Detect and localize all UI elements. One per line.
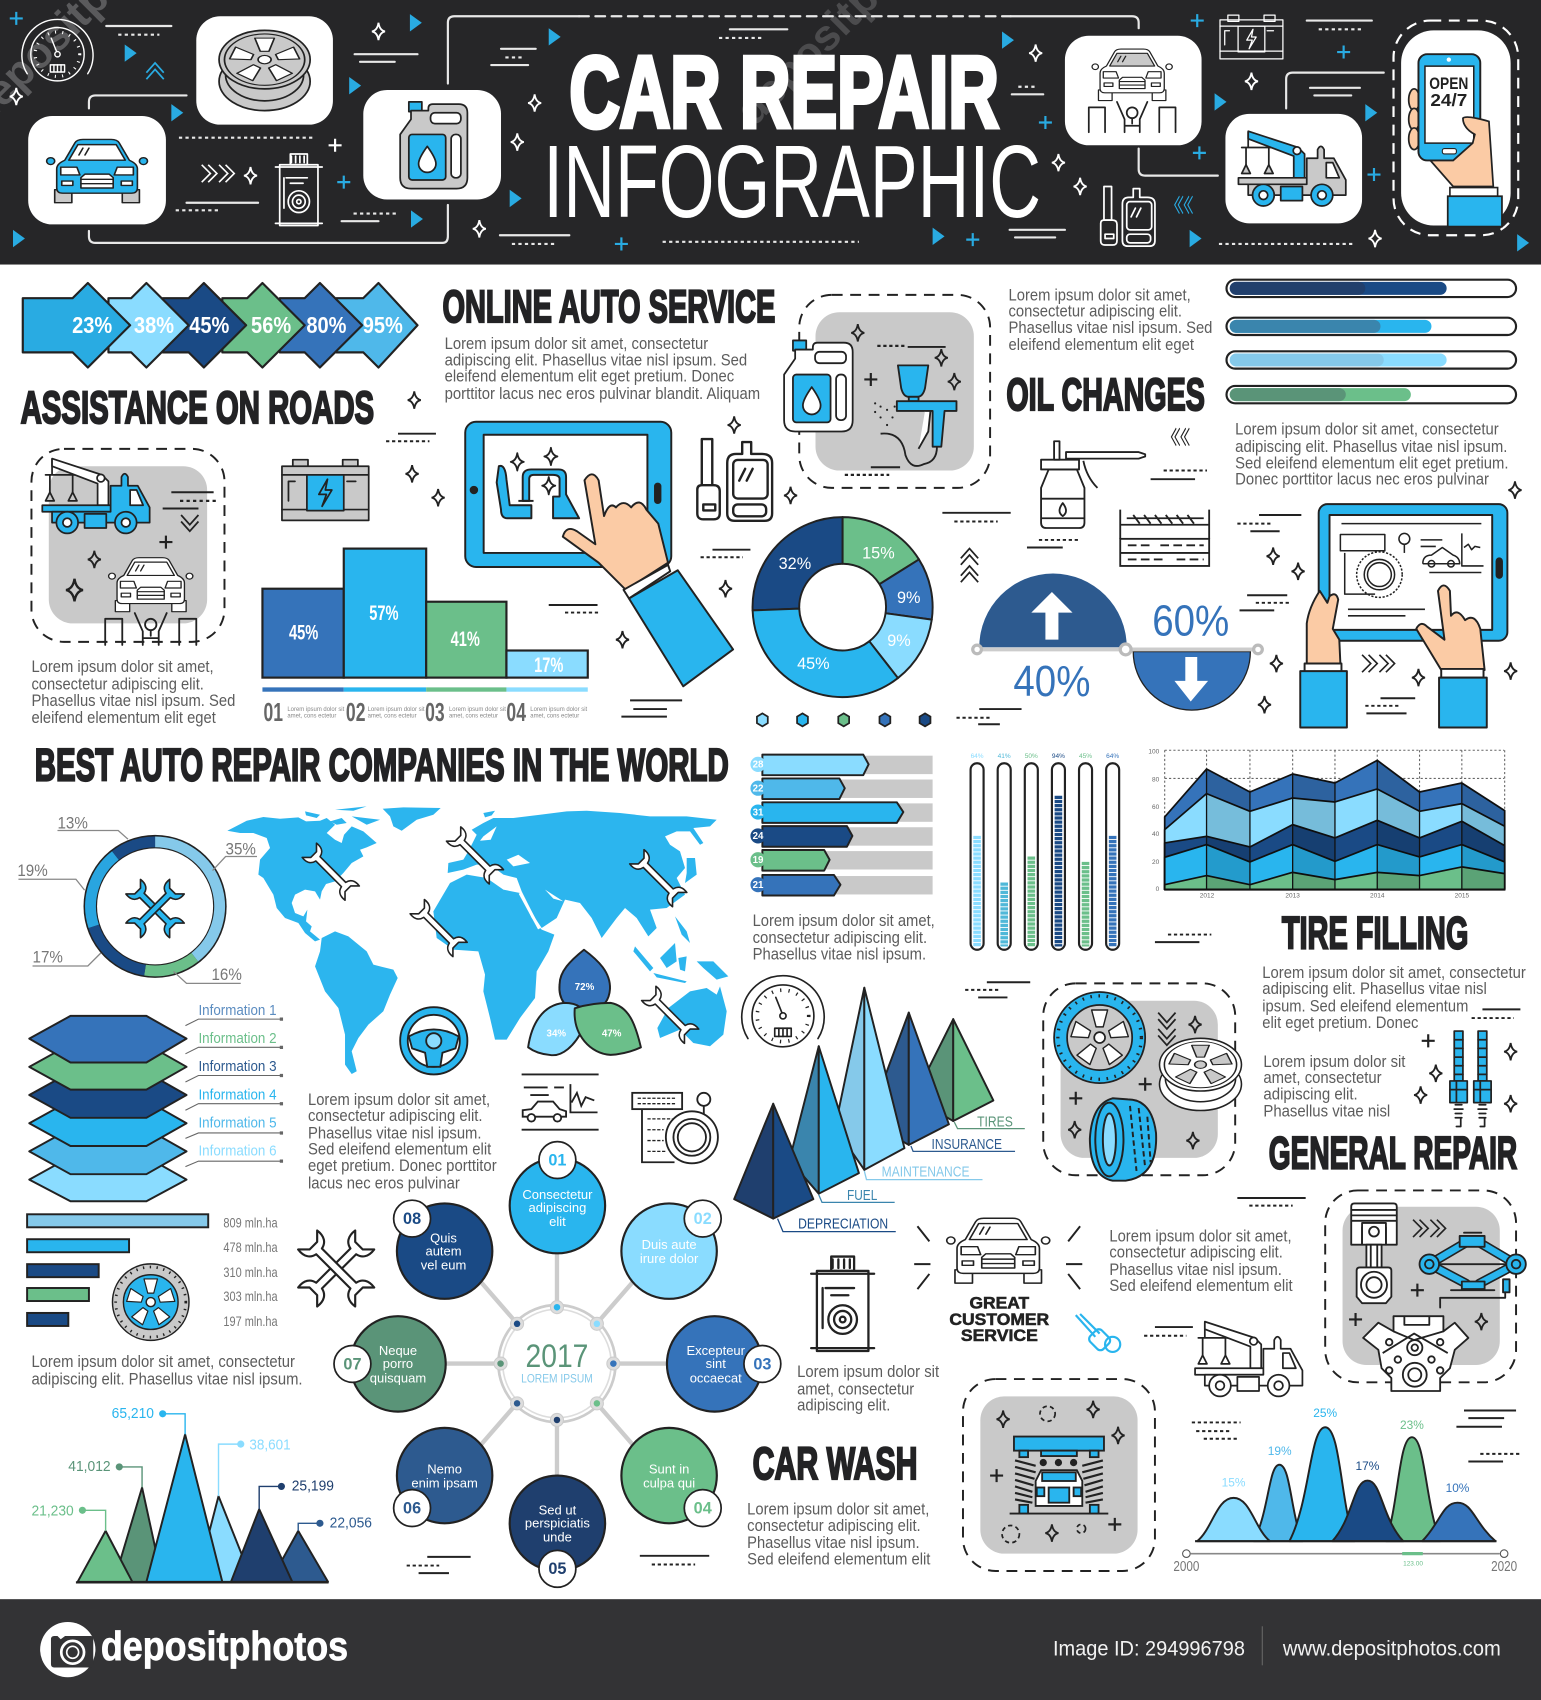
chart: bell peaks: 17%	[1356, 1459, 1380, 1473]
icon: toolbox	[1120, 510, 1209, 566]
text block: online auto service: porttitor lacus nec eros pulvinar blandit. Aliquam	[445, 384, 760, 403]
icon: car diagnostic chart	[522, 1074, 599, 1130]
chart: bell peaks: 23%	[1400, 1418, 1424, 1432]
node 05: 05	[548, 1560, 566, 1578]
footer url: www.depositphotos.com	[1282, 1636, 1501, 1661]
labels: pyramid categories: INSURANCE	[932, 1137, 1002, 1153]
bar chart: mln ha	[27, 1214, 278, 1329]
percentage arrows: 38%	[134, 312, 174, 338]
percentage arrows: 80%	[306, 312, 346, 338]
bar chart: four bars: 57%	[369, 600, 399, 625]
percentage arrows	[23, 283, 418, 368]
chart: mountain peaks: 65,210	[112, 1405, 154, 1422]
icon card: oil canister	[363, 90, 501, 199]
chart: mountain peaks: 22,056	[330, 1515, 372, 1532]
icon: tire document	[632, 1093, 718, 1163]
text block: world map: Phasellus vitae nisl ipsum.	[308, 1123, 481, 1142]
chart: vertical tubes: 64%	[971, 753, 984, 760]
chart: layered area: 2013	[1285, 893, 1300, 900]
chart: three petals: 72%	[575, 982, 595, 993]
node 06: 06	[403, 1500, 421, 1518]
node 01: elit	[549, 1214, 566, 1229]
text block: assistance: Phasellus vitae nisl ipsum. Sed	[31, 691, 235, 710]
text block: world map: Sed eleifend elementum elit	[308, 1140, 492, 1159]
node 02: 02	[694, 1210, 712, 1228]
chart: mountain peaks: 21,230	[31, 1503, 74, 1520]
heading: online auto service: ONLINE AUTO SERVICE	[442, 281, 775, 332]
node 02: irure dolor	[640, 1251, 699, 1266]
icon: piston	[1351, 1203, 1397, 1303]
icon: great customer service car	[914, 1218, 1082, 1289]
chart: circular hub 2017: 2017	[526, 1338, 588, 1374]
chart: layered area: 0	[1156, 886, 1160, 893]
chart: 40% and 60% half circles	[973, 574, 1262, 710]
text block: world map: consectetur adipiscing elit.	[308, 1106, 483, 1125]
bar chart: four bars: amet, cons ectetur	[449, 714, 498, 720]
heading: oil changes: OIL CHANGES	[1006, 369, 1205, 420]
ring chart with wrenches	[17, 814, 257, 984]
bar chart: four bars: amet, cons ectetur	[287, 714, 336, 720]
donut chart: 32%	[779, 555, 811, 573]
node 08: 08	[403, 1210, 421, 1228]
chart: vertical tubes: 64%	[1106, 753, 1119, 760]
panel: general repair illustration	[1325, 1190, 1526, 1391]
percentage arrows: 23%	[72, 312, 112, 338]
node 02	[621, 1200, 721, 1299]
node 04: Sunt in	[649, 1461, 689, 1476]
donut chart: 15%	[862, 544, 895, 562]
text block: customer service	[1109, 1226, 1293, 1295]
bar chart: four bars: 45%	[289, 620, 318, 645]
donut chart: 9%	[897, 589, 921, 607]
node 08: autem	[425, 1243, 462, 1258]
node 08: vel eum	[421, 1258, 466, 1273]
percentage arrows: 95%	[363, 312, 403, 338]
bar chart: four bars: amet, cons ectetur	[368, 714, 417, 720]
text: great customer service: GREAT	[969, 1295, 1029, 1313]
chart: horizontal arrow bars: 21	[753, 880, 764, 891]
text: great customer service: SERVICE	[961, 1327, 1038, 1345]
node 07: 07	[343, 1355, 361, 1373]
text block: bars: adipiscing elit. Phasellus vitae nisl ipsum.	[31, 1370, 303, 1389]
text block: oil changes	[1235, 420, 1508, 489]
icon: blue car key	[1076, 1314, 1120, 1352]
panel: assistance on roads illustration	[31, 449, 224, 645]
text block: customer service: consectetur adipiscing elit.	[1109, 1243, 1283, 1262]
title: INFOGRAPHIC	[543, 124, 1041, 239]
text block: assistance: eleifend elementum elit eget	[31, 708, 216, 727]
text block: spark plugs: Lorem ipsum dolor sit	[1263, 1052, 1406, 1071]
icon card: phone open 24/7: 24/7	[1430, 90, 1467, 110]
text block: world map: eget pretium. Donec porttitor	[308, 1156, 497, 1175]
bar chart: mln ha: 303 mln.ha	[223, 1289, 278, 1304]
chart: vertical tubes: 41%	[998, 753, 1011, 760]
footer logo: depositphotos	[101, 1623, 348, 1669]
icon card: car	[28, 116, 166, 224]
text block: arrow bars	[753, 911, 935, 964]
chart: horizontal arrow bars	[750, 755, 933, 896]
node 05: Sed ut	[539, 1503, 577, 1518]
node 07: Neque	[379, 1343, 417, 1358]
legend: information labels: Information 4	[198, 1087, 277, 1103]
chart: layered area: 20	[1152, 859, 1160, 866]
text block: car wash: Sed eleifend elementum elit	[747, 1549, 931, 1568]
legend: information labels: Information 6	[198, 1144, 277, 1160]
text block: top right: Phasellus vitae nisl ipsum. Sed	[1009, 318, 1212, 337]
bar chart: four bars: 01	[264, 697, 283, 727]
text block: customer service: Phasellus vitae nisl ipsum.	[1109, 1260, 1282, 1279]
icon: speedometer	[742, 976, 824, 1047]
heading: assistance on roads: ASSISTANCE ON ROADS	[21, 382, 374, 433]
text block: tire filling	[1262, 963, 1526, 1032]
chart: bell peaks	[1173, 1406, 1517, 1575]
text block: online auto service	[445, 334, 760, 403]
text block: oil changes: Donec porttitor lacus nec eros pulvinar	[1235, 470, 1489, 489]
node 01: adipiscing	[528, 1200, 586, 1215]
icon card: phone open 24/7: OPEN	[1429, 75, 1468, 93]
bar chart: four bars	[262, 549, 588, 727]
bar chart: four bars: 04	[506, 697, 526, 727]
text block: top right: Lorem ipsum dolor sit amet,	[1009, 285, 1191, 304]
ring chart with wrenches: 19%	[17, 862, 48, 880]
bar chart: mln ha: 809 mln.ha	[223, 1215, 278, 1230]
chart: horizontal arrow bars: 24	[753, 831, 764, 842]
bar chart: four bars: Lorem ipsum dolor sit	[287, 707, 345, 713]
text: great customer service	[949, 1295, 1049, 1345]
chart: vertical tubes	[971, 753, 1119, 950]
chart: layered area	[1148, 749, 1505, 900]
ring chart with wrenches: 17%	[33, 949, 63, 967]
text block: oil changes: adipiscing elit. Phasellus vitae nisl ipsum.	[1235, 437, 1507, 456]
chart: circular hub 2017: LOREM IPSUM	[521, 1371, 593, 1385]
ring chart with wrenches: 35%	[226, 840, 256, 858]
chart: bell peaks: 10%	[1446, 1481, 1470, 1495]
legend: information labels: Information 5	[198, 1116, 277, 1132]
chart: bell peaks: 19%	[1268, 1444, 1292, 1458]
title: CAR REPAIR	[569, 37, 999, 149]
text block: oil bottle: adipiscing elit.	[797, 1396, 890, 1415]
node 05: unde	[543, 1530, 572, 1545]
bar chart: four bars: 17%	[534, 652, 563, 677]
text block: top right	[1009, 285, 1212, 354]
text block: bars	[31, 1352, 303, 1389]
icon: oil bottle	[811, 1257, 874, 1351]
text block: car wash: Phasellus vitae nisl ipsum.	[747, 1533, 920, 1552]
text block: car wash: Lorem ipsum dolor sit amet,	[747, 1500, 929, 1519]
donut chart: 9%	[887, 632, 911, 650]
node 05: perspiciatis	[525, 1516, 590, 1531]
text block: oil bottle: Lorem ipsum dolor sit	[797, 1362, 939, 1381]
node 04	[621, 1428, 721, 1527]
text block: assistance	[31, 657, 235, 727]
chart: layered area: 100	[1148, 749, 1160, 756]
text block: assistance: Lorem ipsum dolor sit amet,	[31, 657, 214, 676]
chart: bell peaks: 123.00	[1403, 1561, 1423, 1568]
chart: bell peaks: 25%	[1313, 1406, 1338, 1420]
chart: vertical tubes: 45%	[1079, 753, 1092, 760]
node 06: enim ipsam	[411, 1476, 478, 1490]
text block: car wash: consectetur adipiscing elit.	[747, 1516, 921, 1535]
node 06: Nemo	[427, 1461, 462, 1476]
icon: wheel	[112, 1264, 189, 1340]
text block: spark plugs: Phasellus vitae nisl	[1263, 1102, 1390, 1121]
chart: bell peaks: 2000	[1173, 1558, 1199, 1575]
legend: information labels: Information 1	[198, 1003, 277, 1019]
text block: top right: eleifend elementum elit eget	[1009, 335, 1194, 354]
node 01: Consectetur	[522, 1187, 593, 1202]
node 07: porro	[383, 1356, 413, 1371]
node 01: 01	[548, 1151, 566, 1169]
icon: speedometer	[22, 19, 93, 81]
bar chart: mln ha: 197 mln.ha	[223, 1314, 278, 1329]
bar chart: four bars: 02	[346, 697, 365, 727]
chart: layered area: 80	[1152, 777, 1160, 784]
panel: tire filling illustration	[1043, 983, 1241, 1181]
chart: layered area: 60	[1152, 804, 1160, 811]
text block: tire filling: elit eget pretium. Donec	[1262, 1013, 1418, 1032]
text block: spark plugs: adipiscing elit.	[1263, 1084, 1358, 1103]
text block: arrow bars: Phasellus vitae nisl ipsum.	[753, 945, 926, 964]
text block: world map: Lorem ipsum dolor sit amet,	[308, 1090, 490, 1109]
chart: layered area: 2015	[1455, 893, 1469, 900]
icon: key and fob	[697, 439, 772, 521]
ring chart with wrenches: 13%	[57, 814, 88, 832]
chart: three petals	[528, 950, 641, 1055]
node 02: Duis aute	[642, 1237, 697, 1252]
icon: spark plugs	[1450, 1031, 1491, 1126]
icon card: car on lift	[1065, 36, 1202, 145]
text block: bars: Lorem ipsum dolor sit amet, consectetur	[31, 1352, 295, 1371]
bar chart: four bars: Lorem ipsum dolor sit	[449, 707, 506, 713]
icon: scissor jack	[1420, 1233, 1526, 1308]
bar chart: four bars: 41%	[451, 626, 480, 651]
text block: arrow bars: consectetur adipiscing elit.	[753, 928, 927, 947]
node 03: sint	[706, 1356, 726, 1371]
labels: pyramid categories: MAINTENANCE	[882, 1164, 970, 1180]
text block: online auto service: Lorem ipsum dolor sit amet, consectetur	[445, 334, 708, 353]
text block: customer service: Sed eleifend elementum elit	[1109, 1276, 1293, 1295]
chart: bell peaks: 15%	[1222, 1475, 1246, 1489]
text block: oil changes: Sed eleifend elementum elit eget pretium.	[1235, 453, 1508, 472]
chart: 40% and 60% half circles: 60%	[1152, 597, 1229, 645]
text block: oil bottle: amet, consectetur	[797, 1379, 915, 1398]
text block: spark plugs: amet, consectetur	[1263, 1068, 1382, 1087]
title	[543, 37, 1041, 239]
node 03: 03	[753, 1355, 771, 1373]
chart: mountain peaks: 25,199	[292, 1478, 334, 1495]
chart: horizontal arrow bars: 19	[753, 855, 764, 866]
panel: header banner	[0, 0, 1541, 265]
icon card: alloy wheel	[196, 16, 333, 125]
chart: mountain peaks	[31, 1405, 372, 1582]
chart: vertical tubes: 94%	[1052, 753, 1065, 760]
text block: top right: consectetur adipiscing elit.	[1009, 302, 1182, 321]
node 03: Excepteur	[686, 1343, 746, 1358]
icon card: phone open 24/7	[1394, 21, 1518, 235]
chart: three petals: 34%	[547, 1028, 566, 1039]
icon: battery	[282, 460, 369, 520]
chart: layered area: 40	[1152, 831, 1160, 838]
text block: tire filling: adipiscing elit. Phasellus vitae nisl	[1262, 979, 1487, 998]
node 03	[667, 1316, 781, 1412]
chart: bell peaks: 2020	[1491, 1558, 1517, 1575]
bar chart: four bars: 03	[425, 697, 445, 727]
icon: oil can with spout	[1041, 441, 1145, 528]
icon: key and fob outline	[1101, 186, 1155, 246]
chart: stacked hexagons	[29, 1016, 187, 1201]
labels: pyramid categories: DEPRECIATION	[798, 1216, 888, 1232]
panel: car wash illustration	[963, 1379, 1155, 1571]
illustration: tablet with hand	[465, 422, 733, 686]
text block: spark plugs	[1263, 1052, 1406, 1121]
node 04: culpa qui	[643, 1476, 695, 1490]
text block: world map: lacus nec eros pulvinar	[308, 1173, 460, 1192]
icon: tow truck outline	[1195, 1322, 1302, 1396]
chart: vertical tubes: 50%	[1025, 753, 1038, 760]
text block: car wash	[747, 1500, 931, 1568]
illustration: tablet held in two hands	[1300, 504, 1507, 727]
text block: arrow bars: Lorem ipsum dolor sit amet,	[753, 911, 935, 930]
icon: steering wheel	[400, 1007, 467, 1074]
text block: assistance: consectetur adipiscing elit.	[31, 675, 204, 694]
chart: horizontal arrow bars: 28	[753, 760, 764, 771]
chart: 40% and 60% half circles: 40%	[1013, 658, 1090, 706]
text block: oil bottle	[797, 1362, 939, 1415]
text block: tire filling: ipsum. Sed eleifend elementum	[1262, 997, 1468, 1016]
bar chart: four bars: Lorem ipsum dolor sit	[530, 707, 588, 713]
chart: layered area: 2014	[1370, 893, 1385, 900]
donut chart: 45%	[797, 655, 830, 673]
icon: battery outline	[1220, 15, 1283, 59]
footer image id: Image ID: 294996798	[1053, 1636, 1245, 1661]
icon: oil can outline	[275, 154, 322, 226]
progress bars	[1227, 280, 1516, 403]
text block: online auto service: eleifend elementum elit eget pretium. Donec	[445, 367, 734, 386]
text block: world map	[308, 1090, 497, 1192]
donut chart	[753, 517, 933, 697]
legend: information labels: Information 3	[198, 1059, 277, 1075]
chart: horizontal arrow bars: 22	[753, 783, 764, 794]
node 07	[334, 1316, 446, 1412]
hexagon legend	[757, 713, 930, 726]
legend: information labels	[185, 1003, 283, 1167]
labels: pyramid categories: FUEL	[847, 1188, 877, 1204]
chart: mountain peaks: 41,012	[68, 1458, 111, 1475]
chart: layered area: 2012	[1200, 893, 1215, 900]
node 01	[510, 1142, 605, 1253]
icon card: tow truck	[1225, 114, 1362, 223]
world map	[227, 806, 728, 1074]
text block: customer service: Lorem ipsum dolor sit amet,	[1109, 1226, 1292, 1245]
icon: crossed wrenches	[298, 1230, 374, 1307]
footer bar	[0, 1599, 1541, 1700]
text block: oil changes: Lorem ipsum dolor sit amet, consectetur	[1235, 420, 1499, 439]
node 05	[510, 1476, 605, 1587]
node 03: occaecat	[690, 1370, 742, 1385]
chart: pyramids	[734, 988, 993, 1219]
percentage arrows: 56%	[251, 312, 291, 338]
bar chart: four bars: amet, cons ectetur	[530, 714, 579, 720]
ring chart with wrenches: 16%	[211, 966, 242, 984]
legend: information labels: Information 2	[198, 1031, 277, 1047]
percentage arrows: 45%	[189, 312, 229, 338]
panel: oil and spray gun	[784, 295, 990, 488]
text: great customer service: CUSTOMER	[949, 1311, 1049, 1329]
labels: pyramid categories	[778, 1114, 1025, 1232]
icon: engine	[1363, 1316, 1468, 1391]
node 08	[394, 1200, 492, 1299]
chart: three petals: 47%	[602, 1028, 622, 1039]
chart: mountain peaks: 38,601	[249, 1437, 291, 1454]
bar chart: mln ha: 310 mln.ha	[223, 1265, 278, 1280]
chart: horizontal arrow bars: 31	[753, 807, 764, 818]
node 08: Quis	[430, 1230, 457, 1245]
node 07: quisquam	[370, 1370, 426, 1385]
text block: online auto service: adipiscing elit. Phasellus vitae nisl ipsum. Sed	[445, 350, 747, 369]
node 04: 04	[694, 1500, 712, 1518]
heading: car wash: CAR WASH	[753, 1438, 917, 1489]
node 06	[394, 1428, 492, 1527]
bar chart: mln ha: 478 mln.ha	[223, 1240, 278, 1255]
labels: pyramid categories: TIRES	[977, 1114, 1013, 1130]
heading: best auto repair companies: BEST AUTO REPAIR COMPANIES IN THE WORLD	[35, 740, 729, 791]
bar chart: four bars: Lorem ipsum dolor sit	[368, 707, 425, 713]
chart: circular hub 2017	[334, 1142, 781, 1587]
footer logo	[40, 1622, 348, 1677]
